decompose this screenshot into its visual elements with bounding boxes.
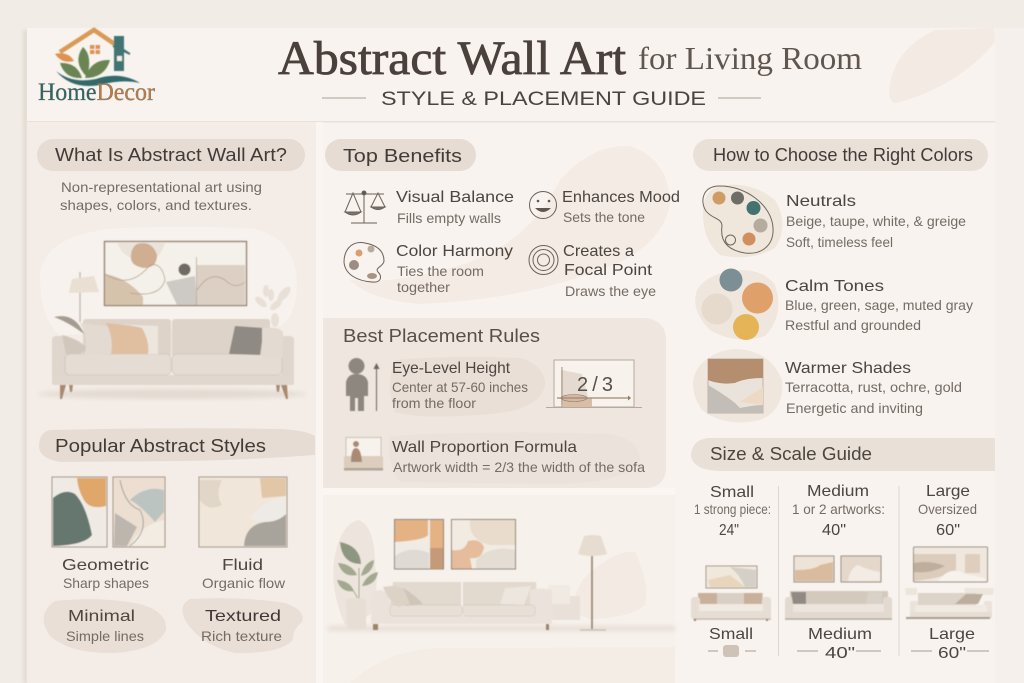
- illustration: floor lamp: [69, 272, 99, 322]
- style: textured: Textured: [205, 608, 281, 625]
- size: medium: Medium: [807, 483, 869, 500]
- dimension: 40 inches: [797, 645, 881, 662]
- size: large: Large: [929, 626, 975, 643]
- logo: HomeDecor: [38, 30, 156, 106]
- art: geometric green: [52, 477, 107, 547]
- benefit: visual balance: [345, 189, 514, 226]
- icon: house: [55, 30, 140, 86]
- color: neutrals: Soft, timeless feel: [786, 234, 893, 250]
- benefit: visual balance: Fills empty walls: [397, 210, 501, 226]
- size: large: 60": [936, 522, 960, 539]
- size: medium: Medium: [808, 626, 872, 643]
- style: minimal: [44, 599, 166, 653]
- dimension: 40 inches: 40": [825, 645, 855, 662]
- color: calm tones: Blue, green, sage, muted gray: [785, 297, 973, 313]
- icon: two-thirds diagram: [546, 360, 642, 408]
- blob: benefits backdrop: [350, 146, 670, 304]
- heading: colors: How to Choose the Right Colors: [713, 145, 973, 165]
- dimension: 60 inches: 60": [938, 645, 966, 662]
- panel: right column: [691, 139, 995, 662]
- gutter under placement rules: [323, 488, 675, 495]
- rule: wall proportion formula: Wall Proportion Formula: [392, 439, 577, 456]
- caption: organic flow: Organic flow: [202, 575, 286, 591]
- benefit: focal point: Focal Point: [564, 262, 653, 279]
- icon: color dots: [695, 268, 778, 340]
- size: small: Small: [709, 626, 753, 643]
- art: medium pair: [794, 556, 881, 582]
- rule: wall proportion formula: Artwork width = 2/3 the width of the sofa: [393, 459, 645, 475]
- text: definition: Non-representational art using: [61, 179, 262, 195]
- sofa: room: [371, 582, 580, 630]
- color: warmer shades: [693, 349, 962, 422]
- heading: best placement rules: Best Placement Rules: [343, 326, 540, 346]
- heading: popular abstract styles: [39, 428, 315, 462]
- benefit: focal point: Creates a: [563, 243, 634, 260]
- subtitle: STYLE & PLACEMENT GUIDE: [381, 89, 706, 110]
- size: large: Oversized: [918, 501, 977, 517]
- sofa: medium: [785, 591, 892, 619]
- blob: living room backdrop: [40, 227, 297, 335]
- style: textured: [182, 598, 303, 653]
- color: neutrals: [703, 185, 966, 257]
- sofa: small: [691, 593, 771, 621]
- rule: wall proportion formula: [344, 432, 645, 484]
- icon: warm artwork: [693, 349, 782, 422]
- color: calm tones: Calm Tones: [785, 278, 884, 295]
- style: minimal: Minimal: [68, 608, 135, 625]
- label: geometric: Geometric: [62, 557, 149, 574]
- size: small: [691, 484, 771, 657]
- text: definition: shapes, colors, and textures.: [60, 197, 252, 213]
- size: large: Large: [926, 483, 970, 500]
- art: geometric blue: [113, 477, 165, 547]
- heading: size and scale guide: [691, 438, 995, 471]
- benefit: enhances mood: Enhances Mood: [562, 189, 680, 206]
- benefit: visual balance: Visual Balance: [396, 189, 514, 206]
- icon: smile: [530, 192, 556, 218]
- icon: two-thirds diagram: 2/3: [577, 374, 613, 396]
- size: medium: 1 or 2 artworks:: [792, 501, 885, 517]
- heading: what is abstract wall art: What Is Abstract Wall Art?: [55, 145, 287, 165]
- sofa: large: [905, 588, 994, 618]
- panel: left column: [27, 122, 323, 683]
- benefit: enhances mood: [530, 189, 680, 225]
- color: calm tones: [695, 268, 973, 340]
- icon: palette: [344, 243, 384, 282]
- icon: person with arrow: [346, 358, 380, 411]
- benefit: enhances mood: Sets the tone: [563, 209, 645, 225]
- logo wordmark: HomeDecor: [38, 79, 156, 106]
- bottom curve: [350, 647, 675, 683]
- title: for Living Room: [638, 40, 862, 76]
- panel: room illustration: [323, 495, 675, 683]
- swatch: small scale: [708, 645, 756, 657]
- illustration: sofa: [37, 316, 307, 399]
- icon: palette: [703, 185, 782, 257]
- size: small: 24": [719, 522, 739, 539]
- label: fluid: Fluid: [222, 557, 263, 574]
- style: geometric: [52, 477, 165, 591]
- benefit: color harmony: Color Harmony: [396, 243, 513, 260]
- panel: placement rules: [323, 318, 666, 488]
- size: large: [905, 483, 994, 662]
- art: small: [706, 566, 757, 588]
- caption: sharp shapes: Sharp shapes: [63, 575, 149, 591]
- art: large: [914, 547, 988, 582]
- heading: top benefits: Top Benefits: [343, 146, 462, 166]
- heading: top benefits: [325, 139, 476, 171]
- color: calm tones: Restful and grounded: [785, 317, 921, 333]
- color: warmer shades: Energetic and inviting: [786, 400, 923, 416]
- size: small: Small: [710, 484, 754, 501]
- dimension: 60 inches: [911, 645, 989, 662]
- heading: colors: [693, 139, 988, 171]
- color: warmer shades: Terracotta, rust, ochre, gold: [785, 379, 962, 395]
- panel: center column: [323, 139, 680, 683]
- heading: what is abstract wall art: [37, 139, 305, 171]
- title: Abstract Wall Art: [278, 32, 627, 85]
- color: neutrals: Neutrals: [786, 193, 856, 210]
- benefit: color harmony: Ties the room: [397, 263, 484, 279]
- rule: eye-level height: [346, 357, 545, 417]
- rule: eye-level height: from the floor: [392, 395, 476, 411]
- title: [278, 32, 862, 85]
- art: abstract right: [452, 520, 516, 569]
- benefit: focal point: Draws the eye: [565, 283, 656, 299]
- floor lamp: [578, 535, 607, 630]
- benefit: focal point: [529, 243, 656, 299]
- heading: size and scale guide: Size & Scale Guide: [710, 444, 872, 464]
- rule: eye-level height: Center at 57-60 inches: [392, 379, 528, 395]
- illustration: plant: [253, 285, 293, 327]
- style: minimal: Simple lines: [66, 628, 144, 644]
- benefit: color harmony: [344, 243, 513, 295]
- icon: concentric target: [529, 246, 558, 274]
- size: small: 1 strong piece:: [694, 501, 771, 517]
- size: medium: 40": [822, 522, 846, 539]
- floor shadow: [328, 626, 675, 631]
- illustration: left wall art: [104, 242, 246, 306]
- blob: lamp backdrop: [574, 552, 646, 619]
- color: neutrals: Beige, taupe, white, & greige: [786, 213, 966, 229]
- text: definition: [60, 179, 262, 213]
- style: textured: Rich texture: [201, 628, 282, 644]
- icon: small sofa scene: [344, 438, 383, 470]
- plant: [337, 542, 378, 630]
- benefit: color harmony: together: [397, 279, 450, 295]
- decorative leaf: header corner: [889, 28, 995, 103]
- icon: scale: [345, 191, 385, 223]
- art: orange diptych left: [394, 520, 444, 569]
- size: medium: [785, 483, 892, 662]
- style: fluid: [199, 477, 287, 591]
- art: fluid: [199, 477, 287, 547]
- blob: plant backdrop: [333, 520, 377, 625]
- color: warmer shades: Warmer Shades: [785, 360, 911, 377]
- rule: eye-level height: Eye-Level Height: [392, 360, 511, 377]
- heading: popular abstract styles: Popular Abstract Styles: [55, 436, 266, 456]
